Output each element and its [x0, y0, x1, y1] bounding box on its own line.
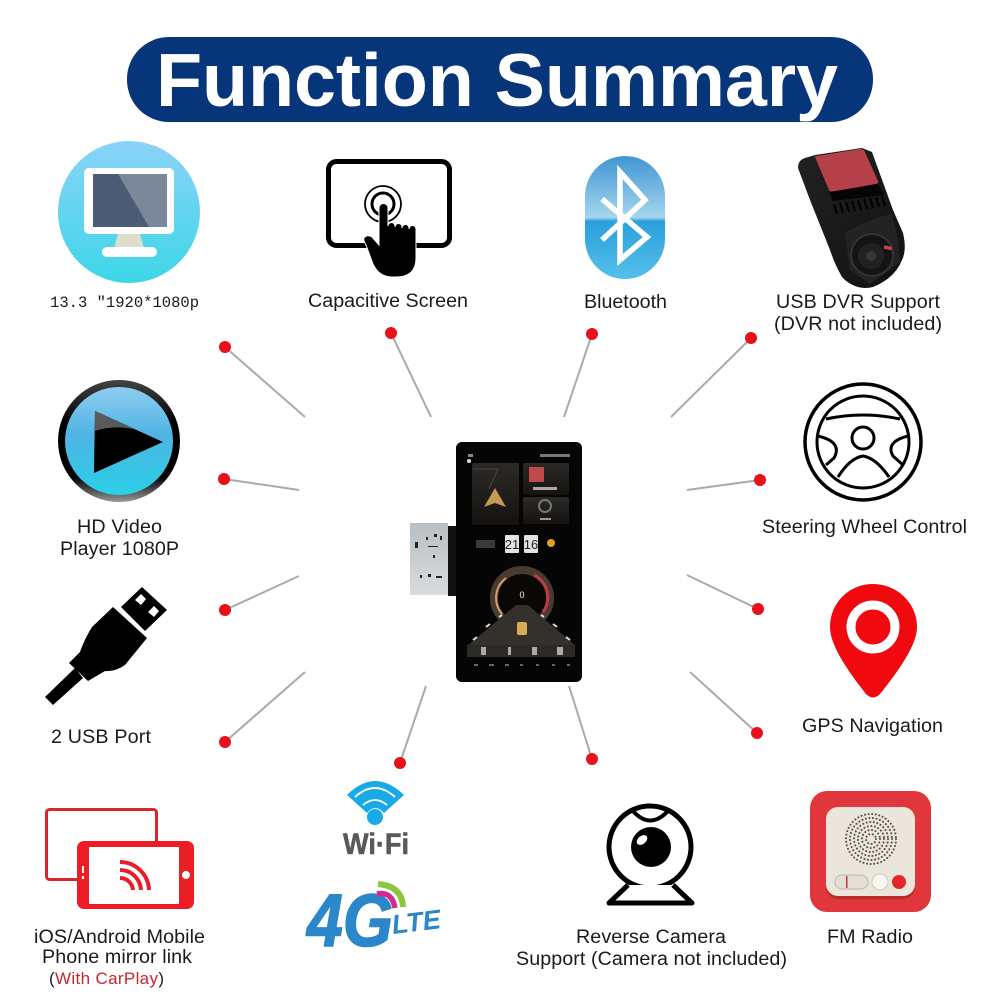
- panel: hd video: [58, 380, 180, 560]
- label: fm radio: FM Radio: [827, 926, 913, 948]
- panel: usb port: [45, 587, 167, 748]
- icon: wifi: Wi·Fi: [343, 828, 409, 861]
- label: phone mirror link: (With CarPlay): [49, 969, 164, 988]
- label: usb dvr support: [774, 291, 942, 335]
- label: reverse camera: [516, 926, 787, 970]
- icon: 4g lte: 4G: [305, 879, 393, 962]
- clock cards: 21: [505, 537, 519, 552]
- panel: fm radio: [810, 791, 931, 948]
- icon: radio: [810, 791, 931, 912]
- label: usb dvr support: USB DVR Support: [776, 291, 941, 313]
- label: hd video: [60, 516, 179, 560]
- title: Function Summary: [156, 38, 838, 122]
- clock cards: [505, 535, 538, 553]
- weather orb: [547, 539, 555, 547]
- label: usb port: 2 USB Port: [51, 726, 152, 748]
- speedometer: 0: [519, 590, 525, 600]
- label: reverse camera: Support (Camera not included): [516, 948, 787, 970]
- icon: bluetooth: [585, 156, 665, 279]
- icon: usb plug: [45, 587, 167, 705]
- panel: capacitive screen: [308, 162, 468, 312]
- panel: bluetooth: [584, 156, 667, 313]
- panel: usb dvr: [774, 148, 942, 335]
- panel: phone mirror link: [34, 810, 205, 988]
- panel: connectivity wifi and 4g: [305, 781, 443, 962]
- connector lines: [224, 333, 760, 763]
- panel: steering wheel: [762, 384, 967, 538]
- icon: phone mirroring: [46, 810, 194, 909]
- tile: navigation: [472, 463, 519, 525]
- label: phone mirror link: [34, 926, 205, 988]
- tile: music: [523, 463, 569, 495]
- clock date: [476, 540, 495, 548]
- panel: gps: [802, 584, 943, 737]
- icon: webcam: [609, 806, 692, 903]
- central product: head unit: [410, 442, 582, 682]
- icon: play button: [58, 380, 180, 502]
- label: hd video: Player 1080P: [60, 538, 179, 560]
- panel: reverse camera: [516, 806, 787, 970]
- label: gps navigation: GPS Navigation: [802, 715, 943, 737]
- screen body: [456, 442, 582, 682]
- icon: map pin: [830, 584, 917, 698]
- status bar: [467, 454, 570, 463]
- icon: 4g lte: LTE: [390, 904, 443, 940]
- speedometer: [494, 570, 550, 626]
- clock cards: 16: [524, 537, 538, 552]
- mounting bracket: [410, 523, 457, 596]
- icon: dash camera: [798, 148, 905, 288]
- tile: settings: [523, 497, 569, 524]
- label: reverse camera: Reverse Camera: [576, 926, 726, 948]
- panel: screen resolution: [50, 141, 200, 312]
- label: capacitive screen: Capacitive Screen: [308, 290, 468, 312]
- label: phone mirror link: iOS/Android Mobile: [34, 926, 205, 948]
- label: steering wheel control: Steering Wheel Control: [762, 516, 967, 538]
- label: phone mirror link: Phone mirror link: [42, 946, 192, 968]
- icon: monitor: [58, 141, 200, 283]
- icon: touch hand: [328, 162, 450, 277]
- dock: [467, 645, 575, 665]
- connector dots: [218, 327, 766, 769]
- label: resolution: 13.3 "1920*1080p: [50, 294, 199, 312]
- label: usb dvr support: (DVR not included): [774, 313, 942, 335]
- road: [467, 605, 576, 646]
- label: hd video: HD Video: [77, 516, 162, 538]
- label: bluetooth: Bluetooth: [584, 291, 667, 313]
- icon: wifi: [343, 781, 409, 861]
- icon: steering wheel: [805, 384, 921, 500]
